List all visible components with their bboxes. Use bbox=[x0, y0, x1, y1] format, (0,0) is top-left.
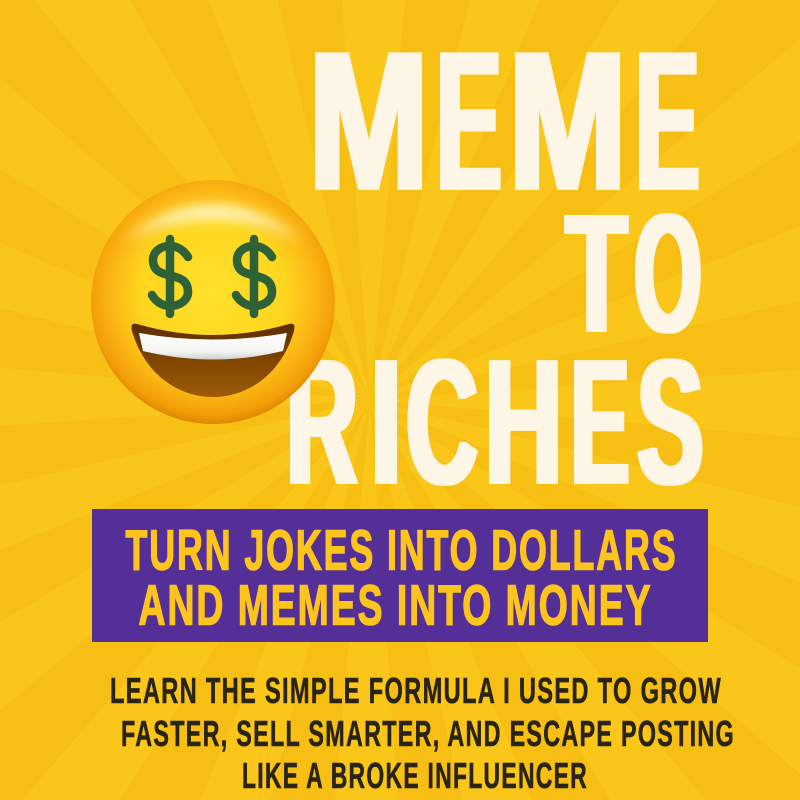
title: I bbox=[371, 322, 402, 523]
title: C bbox=[406, 322, 478, 523]
description text: LIKE A BROKE INFLUENCER bbox=[242, 755, 588, 796]
title: M bbox=[308, 10, 429, 233]
title: S bbox=[637, 322, 703, 523]
title: E bbox=[436, 10, 501, 233]
title: R bbox=[286, 322, 358, 523]
title: E bbox=[636, 10, 699, 233]
title: T bbox=[566, 179, 627, 369]
icon: right dollar eye bbox=[236, 239, 272, 314]
title bbox=[286, 10, 703, 523]
title: E bbox=[571, 322, 629, 523]
title: H bbox=[485, 322, 562, 523]
subtitle banner bbox=[92, 509, 708, 642]
icon: left dollar eye bbox=[152, 239, 188, 314]
description text bbox=[110, 670, 735, 796]
icon: smiling mouth bbox=[132, 324, 294, 397]
title: O bbox=[634, 179, 701, 369]
title: M bbox=[509, 10, 627, 233]
icon: money-eyes emoji bbox=[91, 180, 335, 424]
